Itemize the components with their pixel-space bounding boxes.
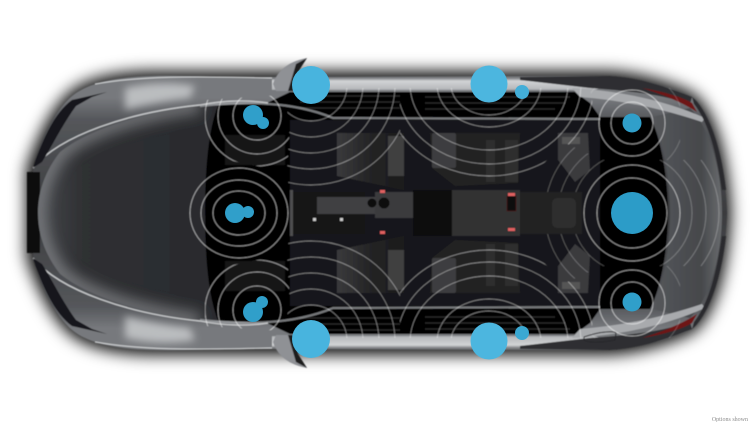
rear storage bbox=[507, 196, 516, 211]
parcel shelf vents bbox=[562, 137, 580, 144]
subwoofer: rear centre bbox=[611, 192, 653, 234]
speaker rings: front corner bbox=[205, 66, 309, 166]
tail light bbox=[642, 88, 697, 112]
speaker rings: rear centre bbox=[546, 147, 720, 279]
speaker rings: rear door bbox=[384, 0, 594, 176]
tweeter: front corner bottom bbox=[256, 296, 268, 308]
rear seat bbox=[430, 133, 520, 186]
rear tray bbox=[520, 192, 582, 234]
rear seat cushions bbox=[486, 140, 518, 182]
speaker: front corner top bbox=[243, 105, 263, 125]
speaker: front door top bbox=[292, 66, 330, 104]
speaker: front corner bottom bbox=[243, 302, 263, 322]
front grille bbox=[27, 172, 40, 253]
centre console bbox=[290, 190, 582, 236]
speaker: rear door top bbox=[470, 66, 508, 102]
tweeter: front centre bbox=[242, 206, 254, 218]
headlight bbox=[33, 92, 107, 168]
sheen stroke bbox=[38, 105, 200, 321]
fender highlight bbox=[125, 83, 195, 110]
door handle bbox=[584, 332, 616, 342]
speaker: front door bottom bbox=[292, 320, 330, 358]
speaker rings: rear corner bbox=[581, 72, 683, 174]
speaker: rear corner top bbox=[622, 114, 642, 132]
hood crease bbox=[33, 101, 268, 168]
side window slats bbox=[300, 96, 570, 109]
mirror dark edge bbox=[288, 58, 307, 91]
car illustration bbox=[26, 58, 728, 368]
console front panel bbox=[290, 192, 365, 234]
red indicators bbox=[380, 190, 515, 234]
speaker: rear door bottom bbox=[470, 322, 508, 360]
parcel shelf bbox=[558, 133, 590, 182]
upper fender bright edge bbox=[95, 77, 272, 84]
tweeter: rear door top bbox=[515, 85, 529, 99]
front seat bbox=[337, 133, 404, 190]
front cabin pad bbox=[225, 135, 285, 165]
front seat insert bbox=[388, 136, 404, 176]
speaker rings: front door bbox=[286, 88, 401, 338]
cabin bbox=[205, 92, 668, 334]
car body bbox=[33, 76, 727, 350]
rear quarter highlight bbox=[572, 88, 705, 122]
rear corner edge bbox=[692, 97, 726, 190]
interior floor bbox=[290, 120, 600, 306]
second knob bbox=[368, 198, 376, 208]
speakers bbox=[225, 66, 653, 360]
speaker: rear corner bottom bbox=[622, 292, 642, 312]
rear quarter bbox=[520, 76, 692, 104]
rear deck bbox=[652, 108, 722, 318]
tweeter: front corner top bbox=[257, 117, 269, 129]
mirrored lower half bbox=[33, 126, 726, 422]
roof rail bbox=[272, 77, 600, 92]
mirror bbox=[273, 58, 307, 91]
tweeter: rear door bottom bbox=[515, 326, 529, 340]
console knobs bbox=[378, 198, 390, 208]
interior band bbox=[200, 103, 600, 119]
rear seat bolster bbox=[432, 133, 456, 168]
shifter panel bbox=[317, 197, 375, 214]
speaker: front centre bbox=[225, 203, 245, 223]
white buttons bbox=[313, 218, 343, 221]
rear armrest bbox=[452, 190, 520, 236]
interior and trim, top half bbox=[33, 0, 726, 300]
rear tray inset bbox=[552, 198, 576, 228]
speaker rings: front centre bbox=[190, 168, 288, 258]
console gap bbox=[413, 190, 452, 236]
hood edge sheen bbox=[38, 105, 200, 321]
car drop shadow bbox=[30, 75, 727, 351]
dashboard strip bbox=[290, 190, 293, 236]
console centre bbox=[375, 192, 413, 218]
hood bbox=[38, 105, 218, 321]
